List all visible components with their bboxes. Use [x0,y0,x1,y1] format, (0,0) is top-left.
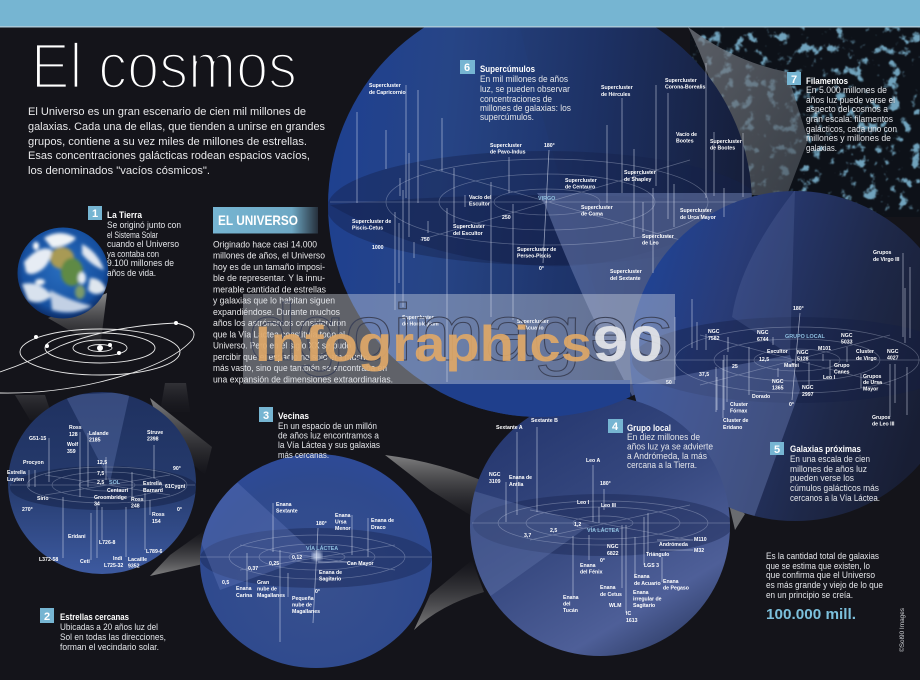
labels: nearby stars: 270° [22,507,33,513]
labels: local group: del Fénix [580,570,603,576]
callout 7: Filamentos [787,72,897,153]
text: El Universo body: una expansión de dimensiones extraordinarias. [213,374,393,386]
labels: nearby galaxies: NGC [887,349,899,355]
labels: superclusters: del Escultor [453,231,483,237]
callout 7: Filamentos: En 5.000 millones de [806,85,887,95]
sphere 3: neighbours [200,448,432,668]
callout 1: La Tierra: Se originó junto con [107,220,181,230]
callout 7: Filamentos: gran escala: filamentos [806,114,894,124]
labels: neighbours: VÍA LÁCTEA [306,544,338,552]
callout 5: Galaxias próximas: pueden verse los [790,473,855,483]
labels: neighbours: 0,12 [292,555,302,561]
labels: superclusters: Piscis-Cetus [352,226,383,232]
callout 4: Grupo local: Grupo local [627,423,671,433]
text: El Universo body [213,240,393,386]
labels: nearby galaxies: 7582 [708,336,720,342]
labels: local group: Leo III [601,503,617,509]
labels: nearby stars: Eridani [68,534,86,540]
labels: nearby stars: Lalande [89,431,109,437]
labels: nearby stars: Luyten [7,477,24,483]
text: El Universo body: merable cantidad de estrellas [213,284,326,296]
labels: local group: Enana [600,585,616,591]
labels: local group: Tucán [563,608,578,614]
callout: total galaxies: que se estima que existen, lo [766,561,870,571]
labels: local group: del [563,602,571,608]
callout: total galaxies: es más grande y viejo de lo que [766,580,883,590]
labels: nearby galaxies: NGC [757,330,769,336]
labels: superclusters: de Centauro [565,184,595,190]
labels: local group: de Cetus [600,592,622,598]
panel: filaments field [690,27,920,217]
labels: superclusters: 180° [544,143,555,149]
labels: superclusters: Supercluster [680,208,712,214]
callout 3: Vecinas: En un espacio de un millón [278,421,377,431]
labels: superclusters: de Hércules [601,92,631,98]
labels: local group: Enana [663,579,679,585]
labels: nearby galaxies: NGC [802,385,814,391]
callout: total galaxies: en un principio se creía. [766,590,853,600]
labels: neighbours [222,502,394,615]
labels: nearby galaxies: 0° [789,402,794,408]
watermark: 90 [593,316,663,372]
labels: neighbours: Carina [236,593,252,599]
callout 5: Galaxias próximas: 5 [774,444,780,456]
labels: superclusters: Supercluster de [352,219,391,225]
callout 1: La Tierra [88,206,181,278]
intro text: grupos, contiene a su vez miles de millones de estrellas. [28,136,307,148]
labels: local group: M32 [694,548,704,554]
labels: nearby stars: 7,5 [97,471,104,477]
labels: nearby stars: Struve [147,430,163,436]
labels: nearby stars: Sirio [37,496,49,502]
labels: local group: Enana de [509,475,532,481]
labels: local group: 180° [600,481,611,487]
labels: neighbours: Pequeña [292,596,314,602]
labels: neighbours: 0° [315,589,320,595]
labels: local group: NGC [607,544,619,550]
labels: nearby stars: 2398 [147,436,159,442]
labels: superclusters: Supercluster [624,170,656,176]
labels: superclusters: del Sextante [610,276,641,282]
callout: total galaxies: que confirma que el Universo [766,570,875,580]
labels: nearby stars: 9352 [128,564,140,570]
labels: nearby stars: Ross [131,497,144,503]
callout 4: Grupo local: En diez millones de [627,432,700,442]
labels: nearby galaxies: 2997 [802,392,814,398]
labels: neighbours: Enana [236,586,252,592]
labels: nearby galaxies: 5128 [797,356,809,362]
labels: nearby stars: 154 [152,519,161,525]
sphere 1: nearby stars [8,392,198,574]
labels: nearby galaxies: Maffei [784,363,800,369]
labels: nearby stars: 90° [173,466,181,472]
labels: nearby galaxies: Fórnax [730,408,747,414]
text: El Universo body: que la Vía Láctea constituía todo el [213,330,345,340]
labels: superclusters: Supercluster [642,234,674,240]
labels: nearby galaxies: M101 [818,346,831,352]
labels: nearby galaxies: Cluster [730,402,748,408]
callout 7: Filamentos: millones y millones de [806,133,891,143]
labels: nearby galaxies: Grupos [863,374,881,380]
labels: superclusters: Supercluster [610,269,642,275]
callout 6: Supercúmulos: millones de galaxias: los [480,103,572,113]
callout 1: La Tierra: el Sistema Solar [107,230,158,240]
labels: superclusters: 250 [502,215,511,221]
text: El Universo body: Originado hace casi 14.000 [213,240,317,250]
callout 6: Supercúmulos: 6 [464,62,470,74]
icon: solar system orbits [0,321,194,393]
callout 1: La Tierra: ya contaba con [107,249,159,259]
callout 5: Galaxias próximas: millones de años luz [790,464,867,474]
callout 6: Supercúmulos: Supercúmulos [480,64,535,74]
labels: nearby galaxies [699,250,900,431]
callout 4: Grupo local: años luz ya se advierte [627,442,713,452]
callout 3: Vecinas: más cercanas. [278,450,329,460]
labels: local group: Enana [633,590,649,596]
callout 2: Estrellas cercanas: Ubicadas a 20 años luz del [60,622,158,632]
intro text: galaxias. Cada una de ellas, que tienden a unirse en grandes [28,121,325,133]
labels: neighbours: Gran [257,580,269,586]
text: El Universo body: más vasto, sino que también se encontraba en [213,363,387,374]
labels: nearby galaxies: NGC [797,350,809,356]
labels: neighbours: 180° [316,521,327,527]
labels: local group: VÍA LÁCTEA [587,526,619,534]
labels: nearby galaxies: Cluster de [723,418,748,424]
labels: nearby stars: 359 [67,449,76,455]
labels: superclusters: 1000 [372,245,384,251]
labels: neighbours: Ursa [335,520,347,526]
callout 4: Grupo local [608,419,713,470]
labels: local group: Sagitario [633,603,655,609]
callout 3: Vecinas [259,407,381,460]
callout 1: La Tierra: cuando el Universo [107,239,179,249]
callout: total galaxies: Es la cantidad total de galaxias [766,551,880,561]
labels: neighbours: 0,25 [269,561,279,567]
labels: local group: Sextante A [496,425,523,431]
labels: nearby stars: 0° [177,507,182,513]
labels: local group: Leo A [586,458,600,464]
labels: neighbours: Enana de [319,570,342,576]
labels: neighbours: Enana de [371,518,394,524]
labels: superclusters: de Acuario [517,326,544,332]
text: El Universo body: expandiéndose. Durante muchos [213,307,340,318]
labels: nearby galaxies: Canes [834,370,850,376]
labels: nearby galaxies: Escultor [767,349,788,355]
callout 4: Grupo local: 4 [612,421,619,433]
labels: local group: 3109 [489,479,501,485]
intro text: El Universo es un gran escenario de cien mil millones de [28,106,306,118]
labels: nearby stars: Wolf [67,442,78,448]
labels: local group: Antlia [509,482,524,488]
labels: superclusters: Supercluster [710,139,742,145]
labels: local group: 1,2 [574,522,581,528]
labels: local group: Sextante B [531,418,558,424]
labels: superclusters: Vacío de [676,132,697,138]
text: El Universo body: ble de representar. Y la innu- [213,273,325,284]
sphere 4: local group [470,396,733,656]
labels: nearby galaxies: de Virgo [856,356,877,362]
labels: nearby galaxies: Grupos [872,415,890,421]
labels: neighbours: Sagitario [319,576,341,582]
labels: superclusters: Supercluster [565,178,597,184]
labels: superclusters: de Horologium [402,322,439,328]
labels: neighbours: Enana [335,513,351,519]
labels: nearby stars: 2,5 [97,480,104,486]
labels: local group: de Pegaso [663,586,689,592]
labels: nearby stars: Barnard [143,488,163,494]
labels: superclusters: Corona-Borealis [665,84,705,90]
labels: local group: 2,5 [550,528,557,534]
labels: nearby stars: Estrella [143,481,162,487]
callout 6: Supercúmulos: En mil millones de años [480,74,569,84]
labels: nearby stars: 2185 [89,438,101,444]
watermark: dgoimages [248,288,673,377]
labels: nearby stars: Procyon [23,460,44,466]
labels: nearby galaxies: Mayor [863,386,878,392]
labels: nearby stars: Groombridge [94,495,127,501]
labels: superclusters: de Shapley [624,177,652,183]
callout 7: Filamentos: Filamentos [806,76,848,86]
labels: superclusters: Supercluster [490,143,522,149]
heading: El Universo [213,207,318,234]
labels: nearby stars: L726-8 [99,540,116,546]
callout 2: Estrellas cercanas: Estrellas cercanas [60,612,129,622]
labels: superclusters: Supercluster [517,319,549,325]
labels: superclusters: Vacío del [469,195,492,201]
labels: nearby stars: Ross [152,512,165,518]
labels: nearby galaxies: Grupo [834,363,850,369]
labels: neighbours: Magallanes [292,609,320,615]
labels: nearby stars: G51-15 [29,436,46,442]
callout 3: Vecinas: la Vía Láctea y sus galaxias [278,440,381,450]
labels: nearby stars: L725-32 [104,563,123,569]
callout 1: La Tierra: 1 [92,208,98,220]
labels: neighbours: Menor [335,526,351,532]
labels: nearby stars: SOL [109,480,121,486]
labels: local group: Enana [563,595,579,601]
labels: nearby stars: 61Cygni [165,484,186,490]
labels: nearby stars: 12,5 [97,460,107,466]
labels: local group: WLM [609,603,621,609]
labels: nearby galaxies: Grupos [873,250,891,256]
labels: local group: IC [626,611,631,617]
callout 1: La Tierra: La Tierra [107,210,142,220]
labels: nearby stars: Ross [69,425,82,431]
watermark: Infographics [255,316,592,372]
intro text: Esas concentraciones galácticas rodean espacios vacíos, [28,150,310,162]
labels: superclusters: 0° [539,266,544,272]
labels: nearby galaxies: GRUPO LOCAL [785,334,826,340]
callout 6: Supercúmulos: luz, se pueden observar [480,84,570,94]
sphere 6 lower rim overlapping the local group [440,380,630,417]
labels: nearby galaxies: 5033 [841,340,853,346]
labels: nearby galaxies: de Leo III [872,422,895,428]
text: El Universo body: años los astrónomos consideraron [213,318,346,329]
callout: total galaxies [766,551,883,623]
callout 6: Supercúmulos [460,60,572,122]
callout 7: Filamentos: años luz puede verse el [806,95,895,105]
intro text: los denominados "vacíos cósmicos". [28,165,210,177]
labels: superclusters: Supercluster [402,315,434,321]
labels: neighbours: Can Mayor [347,561,374,567]
labels: local group: Enana [634,574,650,580]
intro text [28,106,325,177]
labels: nearby stars: 34 [94,502,100,508]
callout 5: Galaxias próximas [770,442,880,503]
labels: nearby stars: Centauri [107,488,129,494]
callout 6: Supercúmulos: supercúmulos. [480,112,534,122]
labels: nearby stars: L372-58 [39,557,58,563]
labels: local group: NGC [489,472,501,478]
labels: nearby galaxies: Dorado [752,394,770,400]
labels: nearby galaxies: Cluster [856,349,874,355]
callout 2: Estrellas cercanas: forman el vecindario solar. [60,642,159,652]
labels: neighbours: Draco [371,525,386,531]
labels: nearby galaxies: NGC [708,329,720,335]
callout 5: Galaxias próximas: Galaxias próximas [790,444,861,454]
labels: nearby galaxies: 180° [793,306,804,312]
labels: nearby galaxies: Leo I [823,375,836,381]
labels: nearby galaxies: 4027 [887,356,899,362]
callout 7: Filamentos: galácticos, cada uno con [806,124,897,134]
labels: superclusters: de Capricornio [369,90,406,96]
labels: local group: irregular de [633,596,662,602]
callout: total galaxies: 100.000 mill. [766,606,856,623]
labels: nearby galaxies: 12,5 [759,357,769,363]
callout 2: Estrellas cercanas: 2 [44,611,50,623]
labels: superclusters: de Coma [581,212,603,218]
labels: local group: Enana [580,563,596,569]
callout 5: Galaxias próximas: cercanos a la Vía Láctea. [790,493,880,503]
labels: nearby galaxies: 25 [732,364,738,370]
labels: nearby stars: L789-6 [146,549,163,555]
labels: superclusters: Supercluster de [517,247,556,253]
labels: local group: Leo I [577,500,590,506]
text: El Universo body: y galaxias que lo habitan siguen [213,296,335,307]
labels: local group: LGS 3 [644,563,659,569]
labels: superclusters: Escultor [469,202,490,208]
callout 1: La Tierra: años de vida. [107,268,156,278]
callout 1: La Tierra: 9.100 millones de [107,258,174,268]
labels: superclusters: Supercluster [665,78,697,84]
labels: superclusters: Supercluster [601,85,633,91]
labels: local group: 0° [600,558,605,564]
labels: neighbours: nube de [257,586,277,592]
callout 2: Estrellas cercanas: Sol en todas las direcciones, [60,632,166,642]
text: El Universo body: millones de años, el Universo [213,251,325,262]
labels: superclusters: 50 [666,380,672,386]
labels: nearby galaxies: NGC [841,333,853,339]
callout 4: Grupo local: a Andrómeda, la más [627,451,708,461]
callout 6: Supercúmulos: concentraciones de [480,94,552,104]
labels: local group: de Acuario [634,581,661,587]
heading: El Universo: EL UNIVERSO [218,212,298,228]
connector cones between scales [15,27,808,630]
sphere 6: superclusters [328,28,752,417]
callout 3: Vecinas: de años luz encontramos a [278,430,379,440]
labels: nearby galaxies: Eridano [723,425,742,431]
callout 7: Filamentos: 7 [791,74,797,86]
labels: nearby stars: Indi [113,556,123,562]
labels: neighbours: 0,5 [222,580,229,586]
callout 7: Filamentos: aspecto del cosmos a [806,104,888,114]
callout 2: Estrellas cercanas [40,608,166,652]
icon: planet Earth [17,227,109,319]
callout 5: Galaxias próximas: En una escala de cien [790,454,870,464]
labels: nearby stars: Estrella [7,470,26,476]
labels: neighbours: Enana [276,502,292,508]
labels: superclusters: Perseo-Piscis [517,254,551,260]
credit: ©Sol90 Images [898,607,906,652]
callout 7: Filamentos: galaxias. [806,143,837,153]
labels: local group: M110 [694,537,707,543]
labels: nearby stars: 248 [131,504,140,510]
labels: nearby galaxies: 1365 [772,386,784,392]
labels: nearby galaxies: NGC [772,379,784,385]
labels: superclusters: Supercluster [453,224,485,230]
labels: superclusters: Bootes [676,138,694,144]
labels: neighbours: nube de [292,602,312,608]
labels: local group: Triángulo [646,552,669,558]
labels: neighbours: 0,37 [248,566,258,572]
labels: local group: Andrómeda [659,542,688,548]
sphere 5: nearby galaxies [630,190,920,521]
labels: neighbours: Sextante [276,508,298,514]
labels: nearby galaxies: de Virgo III [873,257,900,263]
labels: superclusters [352,78,742,386]
labels: local group: 3,7 [524,533,531,539]
labels: superclusters: de Urca Mayor [680,215,716,221]
text: El Universo body: percibir que el espacio no solo era mucho [213,352,370,363]
labels: superclusters: Supercluster [369,83,401,89]
labels: superclusters: 750 [421,237,430,243]
labels: superclusters: VIRGO [538,196,555,202]
callout 3: Vecinas: Vecinas [278,411,309,421]
labels: superclusters: Supercluster [581,205,613,211]
labels: superclusters: de Pavo-Indus [490,150,526,156]
labels: nearby stars [7,425,186,570]
title: El cosmos [31,30,297,102]
labels: local group: 1613 [626,618,638,624]
labels: nearby galaxies: de Ursa [863,380,882,386]
callout 3: Vecinas: 3 [263,410,269,422]
text: El Universo body: Universo. Pero en el siglo XX se pudo [213,341,351,352]
labels: nearby stars: 128 [69,432,78,438]
labels: neighbours: Magallanes [257,593,285,599]
callout 5: Galaxias próximas: cúmulos galácticos más [790,483,880,493]
labels: nearby stars: Lacaille [128,557,147,563]
labels: superclusters: de Leo [642,240,659,246]
labels: local group: 6822 [607,551,619,557]
labels: nearby stars: Ceti [80,559,90,565]
labels: local group [489,418,707,624]
labels: superclusters: de Bootes [710,146,735,152]
labels: nearby galaxies: 37,5 [699,372,709,378]
callout 4: Grupo local: cercana a la Tierra. [627,460,697,470]
labels: nearby galaxies: 6744 [757,337,769,343]
text: El Universo body: hoy es de un tamaño imposi- [213,262,325,273]
top band [0,0,920,28]
